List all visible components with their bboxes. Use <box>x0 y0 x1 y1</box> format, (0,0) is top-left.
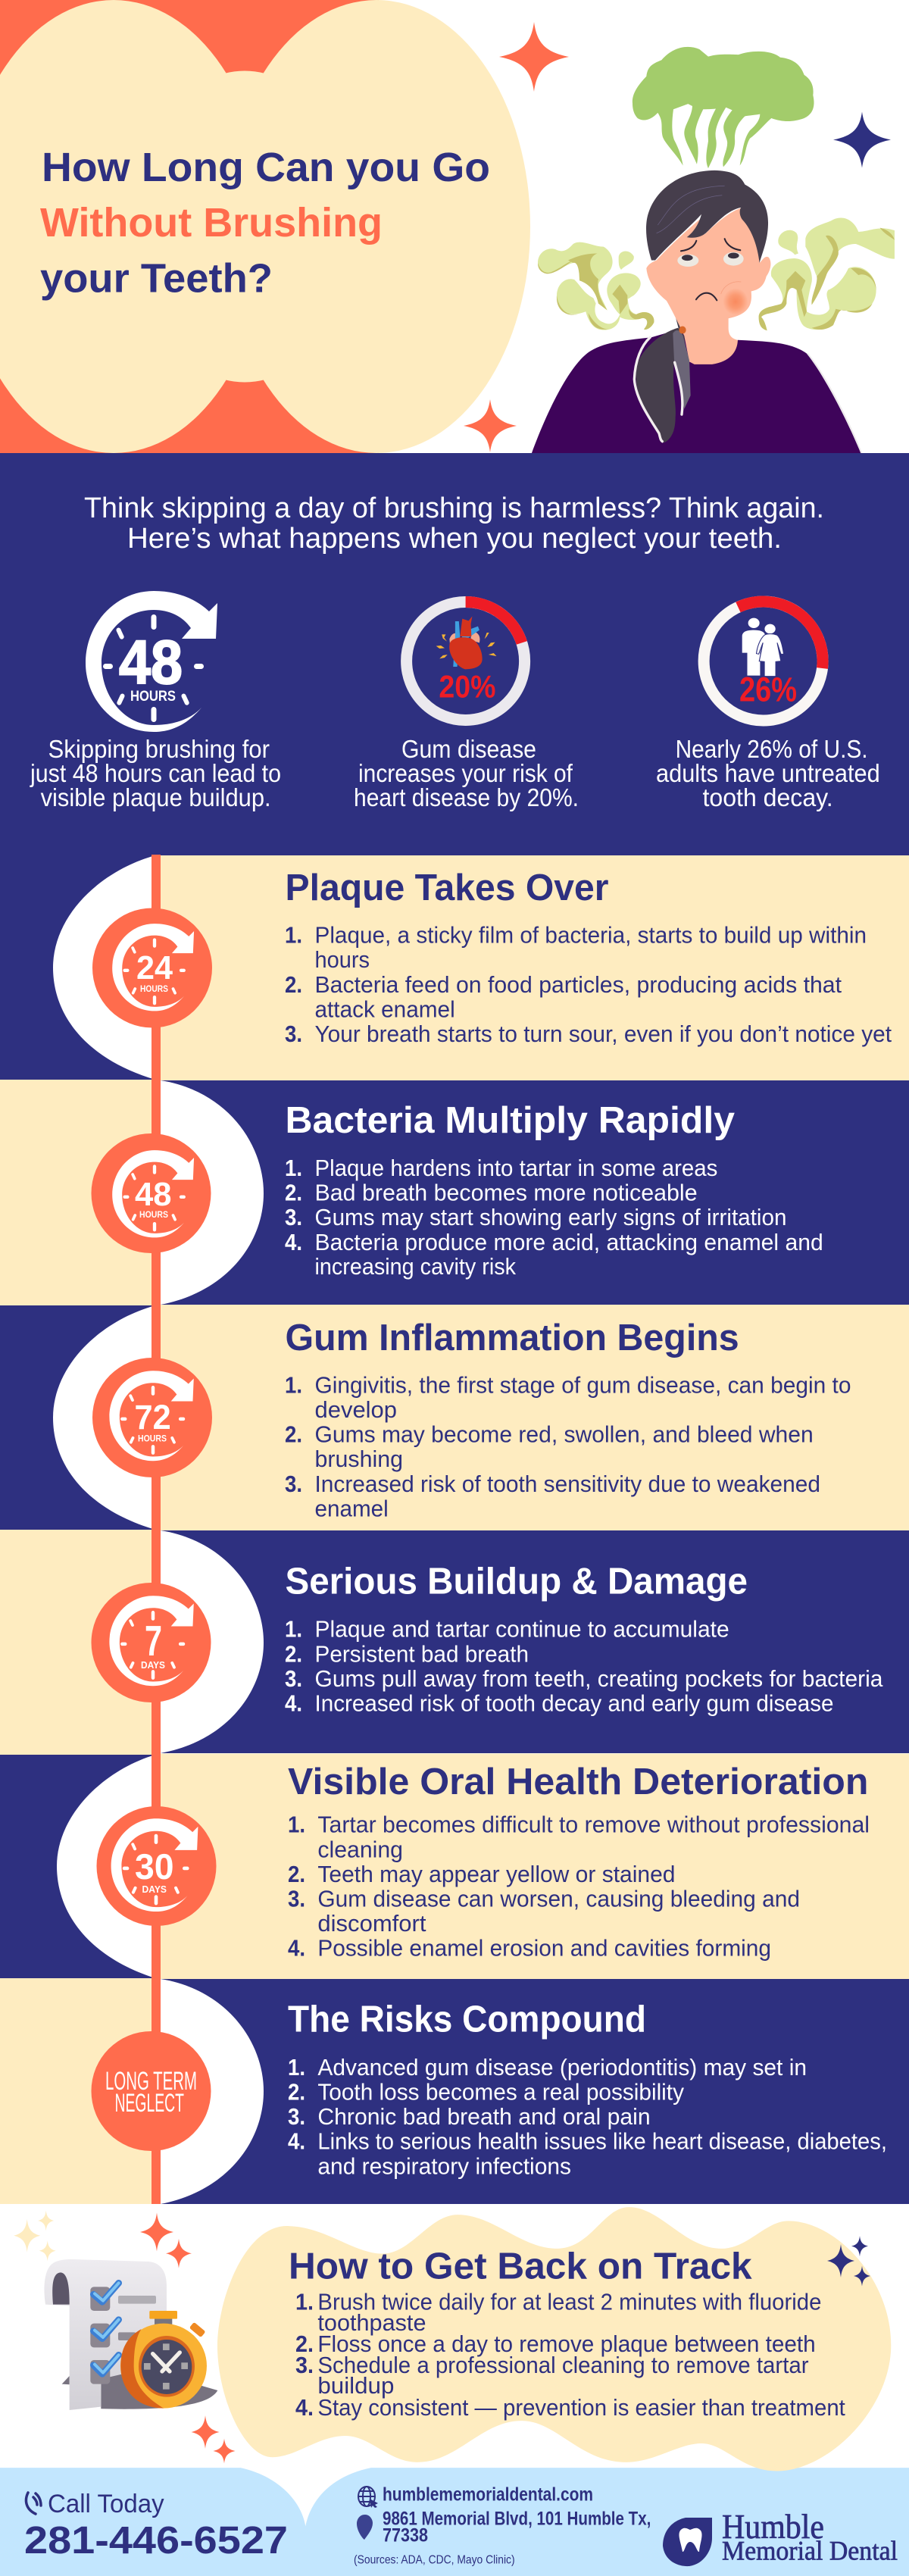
stat: 20% ring with heart <box>407 602 525 720</box>
heading: Serious Buildup & Damage <box>285 1561 748 1602</box>
list: Gums may start showing early signs of irritation <box>315 1204 786 1230</box>
panel: 72 hours <box>0 1305 909 1530</box>
title: How Long Can you Go <box>42 145 490 190</box>
list: brushing <box>315 1446 403 1472</box>
list: buildup <box>317 2372 394 2399</box>
list: attack enamel <box>315 996 455 1023</box>
panel: back on track <box>14 2207 891 2471</box>
list: Schedule a professional cleaning to remove tartar <box>317 2352 809 2378</box>
stat caption: 26%: tooth decay. <box>703 783 833 811</box>
icon: orange sparkles bottom <box>191 2415 235 2464</box>
list: 2. <box>295 2331 314 2357</box>
list: Plaque hardens into tartar in some areas <box>315 1155 717 1181</box>
list: increasing cavity risk <box>315 1253 516 1280</box>
badge: 30 days <box>97 1806 217 1926</box>
list: 1. <box>295 2288 314 2315</box>
list: 3. <box>285 1471 302 1497</box>
stat: 26% ring with people: 26% <box>739 671 797 709</box>
list: Bad breath becomes more noticeable <box>315 1180 698 1206</box>
list: 4. <box>285 1229 302 1255</box>
stat: 26% ring with people <box>704 602 823 721</box>
stat caption: 26%: adults have untreated <box>656 759 880 787</box>
stat caption: 20% <box>354 735 579 811</box>
logo: Memorial Dental <box>722 2535 898 2565</box>
list <box>285 1371 851 1521</box>
list: Persistent bad breath <box>315 1641 529 1667</box>
badge: 48 hours <box>91 1133 211 1253</box>
list: Brush twice daily for at least 2 minutes with fluoride <box>317 2288 821 2315</box>
list: Increased risk of tooth decay and early gum disease <box>315 1690 833 1716</box>
list: Tooth loss becomes a real possibility <box>317 2078 684 2105</box>
list: Tartar becomes difficult to remove without professional <box>317 1812 870 1838</box>
panel: 30 days <box>0 1753 909 1979</box>
list: Links to serious health issues like heart disease, diabetes, <box>317 2128 887 2155</box>
list <box>285 1155 823 1280</box>
address: 77338 <box>383 2524 428 2546</box>
list: Plaque, a sticky film of bacteria, starts to build up within <box>315 921 867 949</box>
panel: 7 days <box>0 1530 909 1755</box>
stat: 20% ring with heart: 20% <box>439 669 495 705</box>
call today: Call Today <box>48 2490 164 2518</box>
list: 1. <box>288 1812 305 1838</box>
header panel <box>0 0 895 454</box>
list: hours <box>315 946 370 973</box>
badge: 30 days: 30 <box>135 1846 174 1887</box>
icon: orange sparkles top <box>140 2212 192 2268</box>
list: 4. <box>285 1690 302 1716</box>
timeline spine <box>152 855 161 2204</box>
stat caption: 48 hours: visible plaque buildup. <box>41 783 271 811</box>
footer panel <box>0 2468 909 2576</box>
list: 2. <box>288 1861 305 1887</box>
icon: navy star <box>833 112 891 168</box>
heading: Bacteria Multiply Rapidly <box>285 1100 735 1141</box>
stat caption: 20%: heart disease by 20%. <box>354 783 579 811</box>
list: 2. <box>288 2078 305 2105</box>
icon: cream sparkles <box>14 2211 56 2261</box>
list: Possible enamel erosion and cavities forming <box>317 1935 771 1961</box>
list: develop <box>315 1396 397 1423</box>
list <box>285 921 892 1047</box>
list: Increased risk of tooth sensitivity due to weakened <box>315 1471 820 1497</box>
badge: 72 hours: HOURS <box>138 1433 167 1444</box>
intro text <box>84 492 824 555</box>
list: 3. <box>288 1885 305 1912</box>
list: 3. <box>285 1021 302 1047</box>
list <box>295 2288 845 2421</box>
icon: heart <box>436 616 496 669</box>
address <box>383 2509 651 2546</box>
icon: people <box>742 618 784 677</box>
badge: 72 hours: 72 <box>135 1398 171 1436</box>
list: 1. <box>285 1371 302 1398</box>
badge: 24 hours: 24 <box>136 949 173 986</box>
list: 1. <box>285 921 302 949</box>
stat: 48 hours clock <box>86 591 217 732</box>
sources: (Sources: ADA, CDC, Mayo Clinic) <box>354 2553 515 2567</box>
badge: long term neglect: NEGLECT <box>115 2089 184 2118</box>
list: and respiratory infections <box>317 2152 571 2179</box>
stat caption: 20%: Gum disease <box>401 735 536 763</box>
icon: phone <box>26 2493 41 2514</box>
list: Your breath starts to turn sour, even if you don’t notice yet <box>315 1021 892 1047</box>
footer background <box>0 2468 909 2576</box>
list <box>288 1812 870 1961</box>
list: 3. <box>285 1204 302 1230</box>
list <box>285 1616 883 1716</box>
badge: 72 hours <box>92 1358 212 1477</box>
list: enamel <box>315 1495 389 1521</box>
panel: 48 hours <box>0 1080 909 1305</box>
header background shape <box>0 0 530 453</box>
list: 3. <box>295 2352 314 2378</box>
address: 9861 Memorial Blvd, 101 Humble Tx, <box>383 2509 651 2530</box>
list: Chronic bad breath and oral pain <box>317 2103 651 2130</box>
list: Gum disease can worsen, causing bleeding and <box>317 1885 800 1912</box>
icon: orange star top <box>499 22 569 92</box>
illustration: woman with bad breath <box>532 47 895 454</box>
icon: navy sparkles <box>827 2236 870 2287</box>
list: cleaning <box>317 1836 403 1862</box>
list: 3. <box>285 1665 302 1692</box>
panel: 24 hours <box>0 855 909 1080</box>
badge: 7 days: 7 <box>145 1617 162 1665</box>
logo: Humble <box>722 2507 824 2546</box>
stat caption: 48 hours: just 48 hours can lead to <box>30 759 281 787</box>
list: Gums may become red, swollen, and bleed when <box>315 1421 814 1448</box>
badge: 24 hours <box>92 908 212 1027</box>
list: Plaque and tartar continue to accumulate <box>315 1616 729 1643</box>
list: 4. <box>288 1935 305 1961</box>
heading: Gum Inflammation Begins <box>285 1318 739 1358</box>
title: Without Brushing <box>40 200 383 245</box>
logo <box>663 2507 898 2566</box>
background blob <box>217 2207 891 2471</box>
intro text: Think skipping a day of brushing is harmless? Think again. <box>84 492 824 524</box>
list: toothpaste <box>317 2309 426 2336</box>
stat: 48 hours clock: HOURS <box>130 689 176 705</box>
heading: Plaque Takes Over <box>285 868 609 908</box>
heading: Visible Oral Health Deterioration <box>288 1762 868 1802</box>
badge: 7 days: DAYS <box>141 1659 165 1671</box>
list <box>288 2054 887 2179</box>
heading: The Risks Compound <box>288 1999 646 2040</box>
icon: map pin <box>357 2515 373 2540</box>
stat caption: 26% <box>656 735 880 811</box>
badge: 30 days: DAYS <box>142 1884 167 1895</box>
list: 2. <box>285 1421 302 1448</box>
badge: 48 hours: HOURS <box>139 1209 168 1220</box>
list: discomfort <box>317 1910 426 1937</box>
stat caption: 48 hours <box>30 735 281 811</box>
list: Floss once a day to remove plaque between teeth <box>317 2331 816 2357</box>
intro text: Here’s what happens when you neglect your teeth. <box>127 523 782 555</box>
badge: long term neglect <box>91 2031 211 2151</box>
website: humblememorialdental.com <box>383 2484 593 2506</box>
icon: orange star bottom <box>464 399 517 452</box>
list: 2. <box>285 1641 302 1667</box>
list: Gums pull away from teeth, creating pockets for bacteria <box>315 1665 883 1692</box>
list: Teeth may appear yellow or stained <box>317 1861 676 1887</box>
list: 2. <box>285 1180 302 1206</box>
badge: 48 hours: 48 <box>135 1176 171 1213</box>
intro panel <box>0 453 909 855</box>
stat: 48 hours clock: 48 <box>119 628 183 697</box>
list: 1. <box>285 1616 302 1643</box>
stat caption: 26%: Nearly 26% of U.S. <box>676 735 868 763</box>
list: 4. <box>288 2128 305 2155</box>
title: your Teeth? <box>40 256 273 302</box>
icon: globe <box>358 2487 378 2508</box>
list: 3. <box>288 2103 305 2130</box>
heading: How to Get Back on Track <box>289 2246 752 2287</box>
phone number: 281-446-6527 <box>24 2518 288 2562</box>
list: 1. <box>285 1155 302 1181</box>
list: 1. <box>288 2054 305 2080</box>
list: 2. <box>285 971 302 998</box>
list: Stay consistent — prevention is easier than treatment <box>317 2394 845 2421</box>
list: 4. <box>295 2394 314 2421</box>
list: Bacteria produce more acid, attacking enamel and <box>315 1229 823 1255</box>
stat caption: 20%: increases your risk of <box>358 759 573 787</box>
panel: long term neglect <box>0 1978 909 2204</box>
list: Advanced gum disease (periodontitis) may set in <box>317 2054 807 2080</box>
badge: 7 days <box>91 1583 211 1702</box>
stat caption: 48 hours: Skipping brushing for <box>48 735 270 763</box>
badge: long term neglect: LONG TERM <box>105 2067 197 2096</box>
badge: 24 hours: HOURS <box>140 983 168 994</box>
list: Bacteria feed on food particles, producing acids that <box>315 971 842 998</box>
title <box>40 145 490 302</box>
icon: checklist with stopwatch <box>44 2259 217 2410</box>
list: Gingivitis, the first stage of gum disease, can begin to <box>315 1371 851 1398</box>
